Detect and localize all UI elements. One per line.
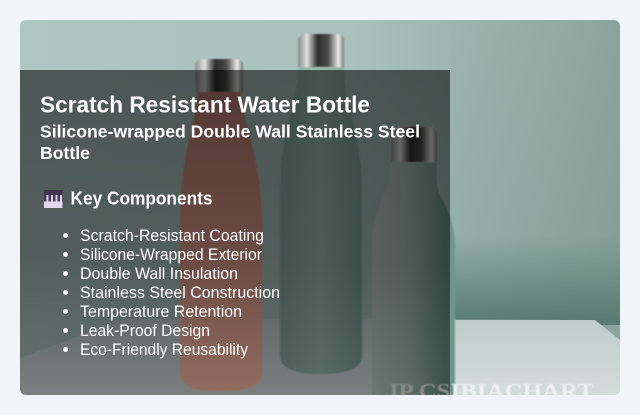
subtitle: Bottle [40, 143, 90, 163]
list: components [63, 227, 280, 359]
list item: Leak-Proof Design [80, 322, 210, 340]
list item: Stainless Steel Construction [80, 284, 280, 302]
list item: Double Wall Insulation [80, 265, 238, 283]
watermark remnant: JP CSIBIACHART [386, 379, 594, 403]
bottle: tall green [280, 34, 362, 374]
panel: dark translucent overlay [20, 70, 450, 395]
list item: Silicone-Wrapped Exterior [80, 246, 262, 264]
heading: key components: Key Components [70, 188, 212, 208]
icon: piano keys [44, 190, 62, 208]
list item: Eco-Friendly Reusability [80, 341, 249, 359]
title: Scratch Resistant Water Bottle [40, 92, 370, 118]
bottle: short green [372, 127, 455, 395]
bottle: pink [180, 59, 262, 391]
list item: Temperature Retention [80, 303, 242, 321]
subtitle: Silicone-wrapped Double Wall Stainless Steel [40, 122, 420, 142]
list item: Scratch-Resistant Coating [80, 227, 264, 245]
table surface [20, 319, 620, 395]
subtitle [40, 122, 420, 163]
